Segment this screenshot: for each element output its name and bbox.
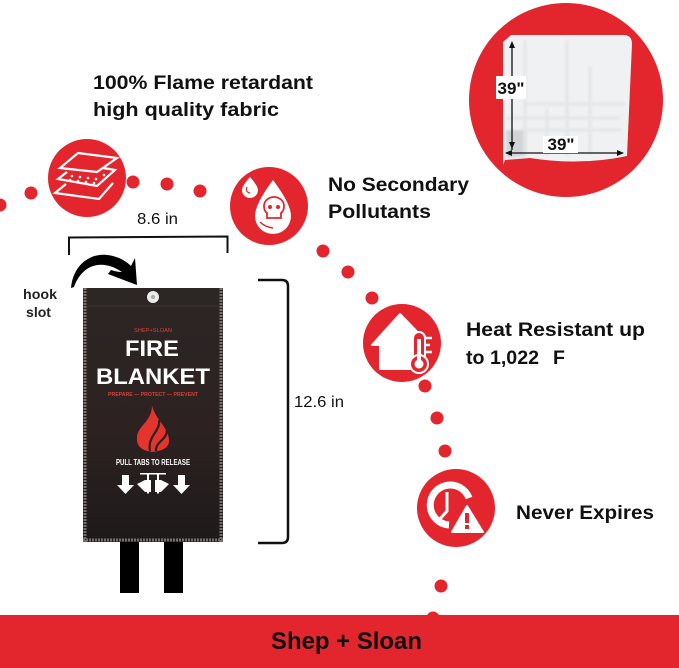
white fabric (503, 35, 632, 165)
bracket: width (69, 236, 228, 255)
product: fire blanket: PREPARE — PROTECT — PREVENT (108, 392, 198, 398)
heading: flame retardant (93, 72, 314, 121)
text: no secondary pollutants: Pollutants (328, 201, 431, 223)
footer bar (0, 615, 679, 668)
label: hook slot: slot (26, 305, 52, 320)
label: 39 width: 39" (548, 135, 574, 154)
icon: fabric layers (48, 139, 126, 217)
product: fire blanket: FIRE (125, 336, 179, 361)
heading: flame retardant: high quality fabric (93, 99, 279, 121)
label: hook slot: hook (23, 287, 58, 302)
dimension arrows (506, 43, 623, 153)
product: fire blanket (83, 288, 223, 593)
panel: blanket size photo (469, 3, 663, 197)
text: heat resistant: Heat Resistant up (466, 319, 645, 341)
icon: droplet with skull (230, 167, 308, 245)
text: no secondary pollutants (328, 174, 469, 223)
arrow: hook slot (71, 255, 137, 288)
bracket: height (258, 280, 288, 543)
text: heat resistant: F (553, 347, 565, 369)
text: heat resistant (466, 319, 645, 369)
text: never expires: Never Expires (516, 502, 654, 524)
label: hook slot (23, 287, 58, 320)
heading: flame retardant: 100% Flame retardant (93, 72, 314, 94)
footer bar: Shep + Sloan (271, 628, 422, 655)
icon: house thermometer (363, 304, 441, 382)
text: heat resistant: to 1,022 (466, 347, 539, 369)
icon: flame (137, 405, 169, 452)
icon: release arrows (117, 473, 190, 494)
pull tabs (120, 540, 183, 593)
dotted path (0, 176, 452, 624)
product: fire blanket: PULL TABS TO RELEASE (116, 458, 191, 467)
product: fire blanket: BLANKET (96, 364, 211, 389)
label: 39 height: 39" (498, 79, 524, 98)
text: no secondary pollutants: No Secondary (328, 174, 469, 196)
product: fire blanket: SHEP+SLOAN (134, 328, 172, 334)
label: height dimension: 12.6 in (294, 394, 344, 411)
icon: clock warning (417, 469, 495, 547)
label: width dimension: 8.6 in (137, 211, 178, 228)
